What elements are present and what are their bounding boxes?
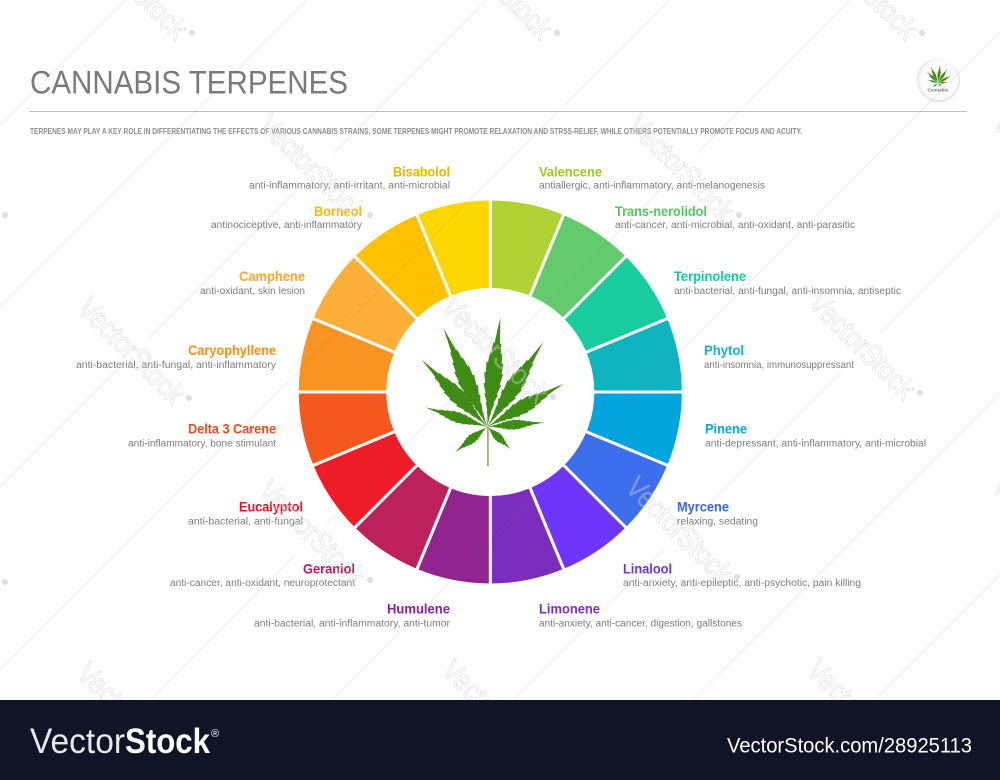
label: Bisabolol: anti-inflammatory, anti-irritant, anti-microbial: [249, 180, 450, 192]
label: Delta 3 Carene: [128, 420, 276, 450]
label: Eucalyptol: anti-bacterial, anti-fungal: [188, 516, 303, 528]
label: Myrcene: relaxing, sedating: [677, 516, 758, 528]
label: Borneol: Borneol: [314, 203, 362, 219]
label: Limonene: Limonene: [539, 600, 600, 616]
text: VectorStock: [252, 109, 372, 229]
label: Borneol: [211, 203, 362, 231]
label: Humulene: Humulene: [387, 600, 450, 616]
label: Humulene: anti-bacterial, anti-inflammatory, anti-tumor: [254, 618, 451, 630]
label: Myrcene: [677, 498, 758, 528]
label: Camphene: anti-oxidant, skin lesion: [200, 286, 305, 297]
text: VectorStock: [621, 109, 741, 229]
text: VectorStock: [435, 291, 555, 411]
label: Terpinolene: anti-bacterial, anti-fungal, anti-insomnia, antiseptic: [674, 286, 901, 297]
icon: cannabis leaf: [416, 316, 567, 466]
label: Myrcene: Myrcene: [677, 498, 729, 514]
label: Trans-nerolidol: [615, 203, 855, 231]
label: Borneol: antinociceptive, anti-inflammatory: [211, 220, 362, 231]
segment: Bisabolol: [416, 185, 522, 305]
segment: Geraniol: [348, 451, 454, 570]
segment: Borneol: [354, 203, 476, 325]
label: Pinene: anti-depressant, anti-inflammatory, anti-microbial: [705, 438, 926, 450]
footer logo: Vector: [30, 722, 125, 761]
icon: cannabis badge: [916, 58, 960, 102]
segment: Terpinolene: [557, 256, 679, 377]
footer bar: [0, 700, 1000, 780]
label: Eucalyptol: Eucalyptol: [239, 498, 303, 514]
footer logo: ®: [211, 728, 219, 740]
label: Linalool: [623, 560, 861, 589]
label: Valencene: Valencene: [539, 164, 602, 180]
label: Bisabolol: Bisabolol: [393, 164, 450, 180]
segment: Humulene: [416, 487, 490, 585]
segment: Pinene: [585, 392, 683, 466]
label: Linalool: anti-anxiety, anti-epileptic, anti-psychotic, pain killing: [623, 578, 861, 589]
label: Caryophyllene: anti-bacterial, anti-fungal, anti-inflammatory: [76, 360, 276, 371]
footer logo: Stock: [125, 722, 210, 761]
segment: Delta 3 Carene: [284, 360, 403, 466]
label: Geraniol: [170, 560, 355, 589]
label: Terpinolene: Terpinolene: [674, 268, 746, 284]
segment: Limonene: [458, 479, 564, 599]
label: Valencene: [539, 164, 765, 192]
segment: Camphene: [312, 250, 431, 356]
label: Terpinolene: [674, 268, 901, 297]
label: Camphene: Camphene: [239, 268, 305, 284]
label: Valencene: antiallergic, anti-inflammatory, anti-melanogenesis: [539, 180, 765, 192]
footer image id: VectorStock.com/28925113: [727, 735, 972, 758]
label: Phytol: anti-insomnia, immunosuppressant: [704, 360, 854, 371]
label: Geraniol: Geraniol: [303, 560, 355, 576]
segment: Myrcene: [550, 428, 669, 534]
label: Limonene: [539, 600, 742, 630]
label: Phytol: [704, 342, 854, 371]
label: Humulene: [254, 600, 451, 630]
segment: Trans-nerolidol: [527, 214, 632, 333]
segment: Valencene: [490, 199, 564, 297]
segment: Caryophyllene: [297, 318, 396, 392]
label: Pinene: Pinene: [705, 420, 747, 436]
icon: cannabis badge: Cannabis: [928, 88, 949, 93]
label: Bisabolol: [249, 164, 450, 192]
segment: Phytol: [578, 318, 697, 424]
label: Eucalyptol: [188, 498, 303, 528]
segment: Linalool: [505, 459, 627, 581]
segment: Eucalyptol: [302, 407, 423, 528]
label: Linalool: Linalool: [623, 560, 672, 576]
label: Trans-nerolidol: Trans-nerolidol: [615, 203, 707, 219]
label: Trans-nerolidol: anti-cancer, anti-microbial, anti-oxidant, anti-parasitic: [615, 220, 855, 231]
label: Phytol: Phytol: [704, 342, 744, 358]
label: Caryophyllene: [76, 342, 276, 371]
label: Limonene: anti-anxiety, anti-cancer, digestion, gallstones: [539, 618, 742, 630]
text: VectorStock: [802, 287, 922, 407]
terpene wheel: [284, 185, 697, 599]
label: Delta 3 Carene: anti-inflammatory, bone stimulant: [128, 438, 276, 450]
label: Pinene: [705, 420, 926, 450]
text: VectorStock: [619, 471, 739, 591]
label: Caryophyllene: Caryophyllene: [188, 342, 276, 358]
label: Camphene: [200, 268, 305, 297]
text: VectorStock: [71, 292, 191, 412]
label: Delta 3 Carene: Delta 3 Carene: [188, 420, 276, 436]
title: CANNABIS TERPENES: [30, 64, 348, 100]
footer logo: [30, 722, 219, 761]
text: VectorStock: [252, 474, 372, 594]
label: Geraniol: anti-cancer, anti-oxidant, neuroprotectant: [170, 578, 355, 589]
